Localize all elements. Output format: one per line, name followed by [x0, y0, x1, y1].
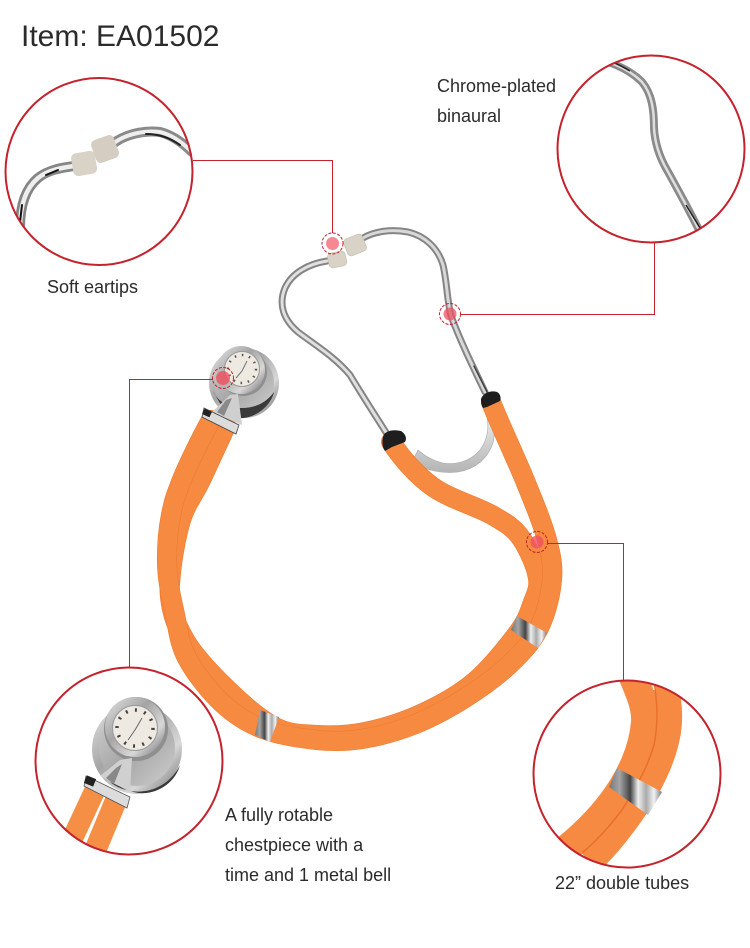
connector: soft eartips: [193, 160, 332, 233]
stethoscope: [167, 231, 552, 742]
hotspot: chestpiece: [212, 368, 234, 388]
chrome binaural left: [282, 261, 387, 434]
panel: soft eartips magnifier: [6, 78, 192, 265]
connector: chestpiece: [130, 380, 213, 667]
hotspot: eartips: [322, 233, 343, 254]
metal strap: [412, 404, 494, 473]
label: chestpiece: A fully rotable: [225, 805, 333, 825]
connector: binaural: [461, 243, 654, 314]
metal tube band lower: [255, 710, 279, 742]
label: chrome-plated binaural: binaural: [437, 106, 501, 126]
panel: double tubes magnifier: [534, 670, 720, 868]
panel: chestpiece magnifier: [36, 668, 222, 858]
eartips: [327, 233, 368, 269]
hotspot: tubes: [526, 532, 548, 552]
black ear tube caps: [382, 391, 501, 451]
label: chestpiece: chestpiece with a: [225, 835, 364, 855]
orange tube from right binaural: [167, 402, 552, 741]
label: chestpiece: time and 1 metal bell: [225, 865, 391, 885]
orange tube from left binaural: [170, 426, 538, 735]
chestpiece: [202, 346, 279, 434]
panel: chrome binaural magnifier: [558, 56, 744, 242]
label: soft eartips: Soft eartips: [47, 277, 138, 297]
hotspot: binaural: [440, 304, 460, 324]
chrome binaural right: [363, 231, 487, 392]
label: chrome-plated binaural: Chrome-plated: [437, 76, 556, 96]
label: double tubes: 22” double tubes: [555, 873, 689, 893]
title: Item: EA01502: [21, 20, 219, 53]
connector: double tubes: [548, 544, 624, 680]
metal tube band right: [511, 616, 547, 648]
